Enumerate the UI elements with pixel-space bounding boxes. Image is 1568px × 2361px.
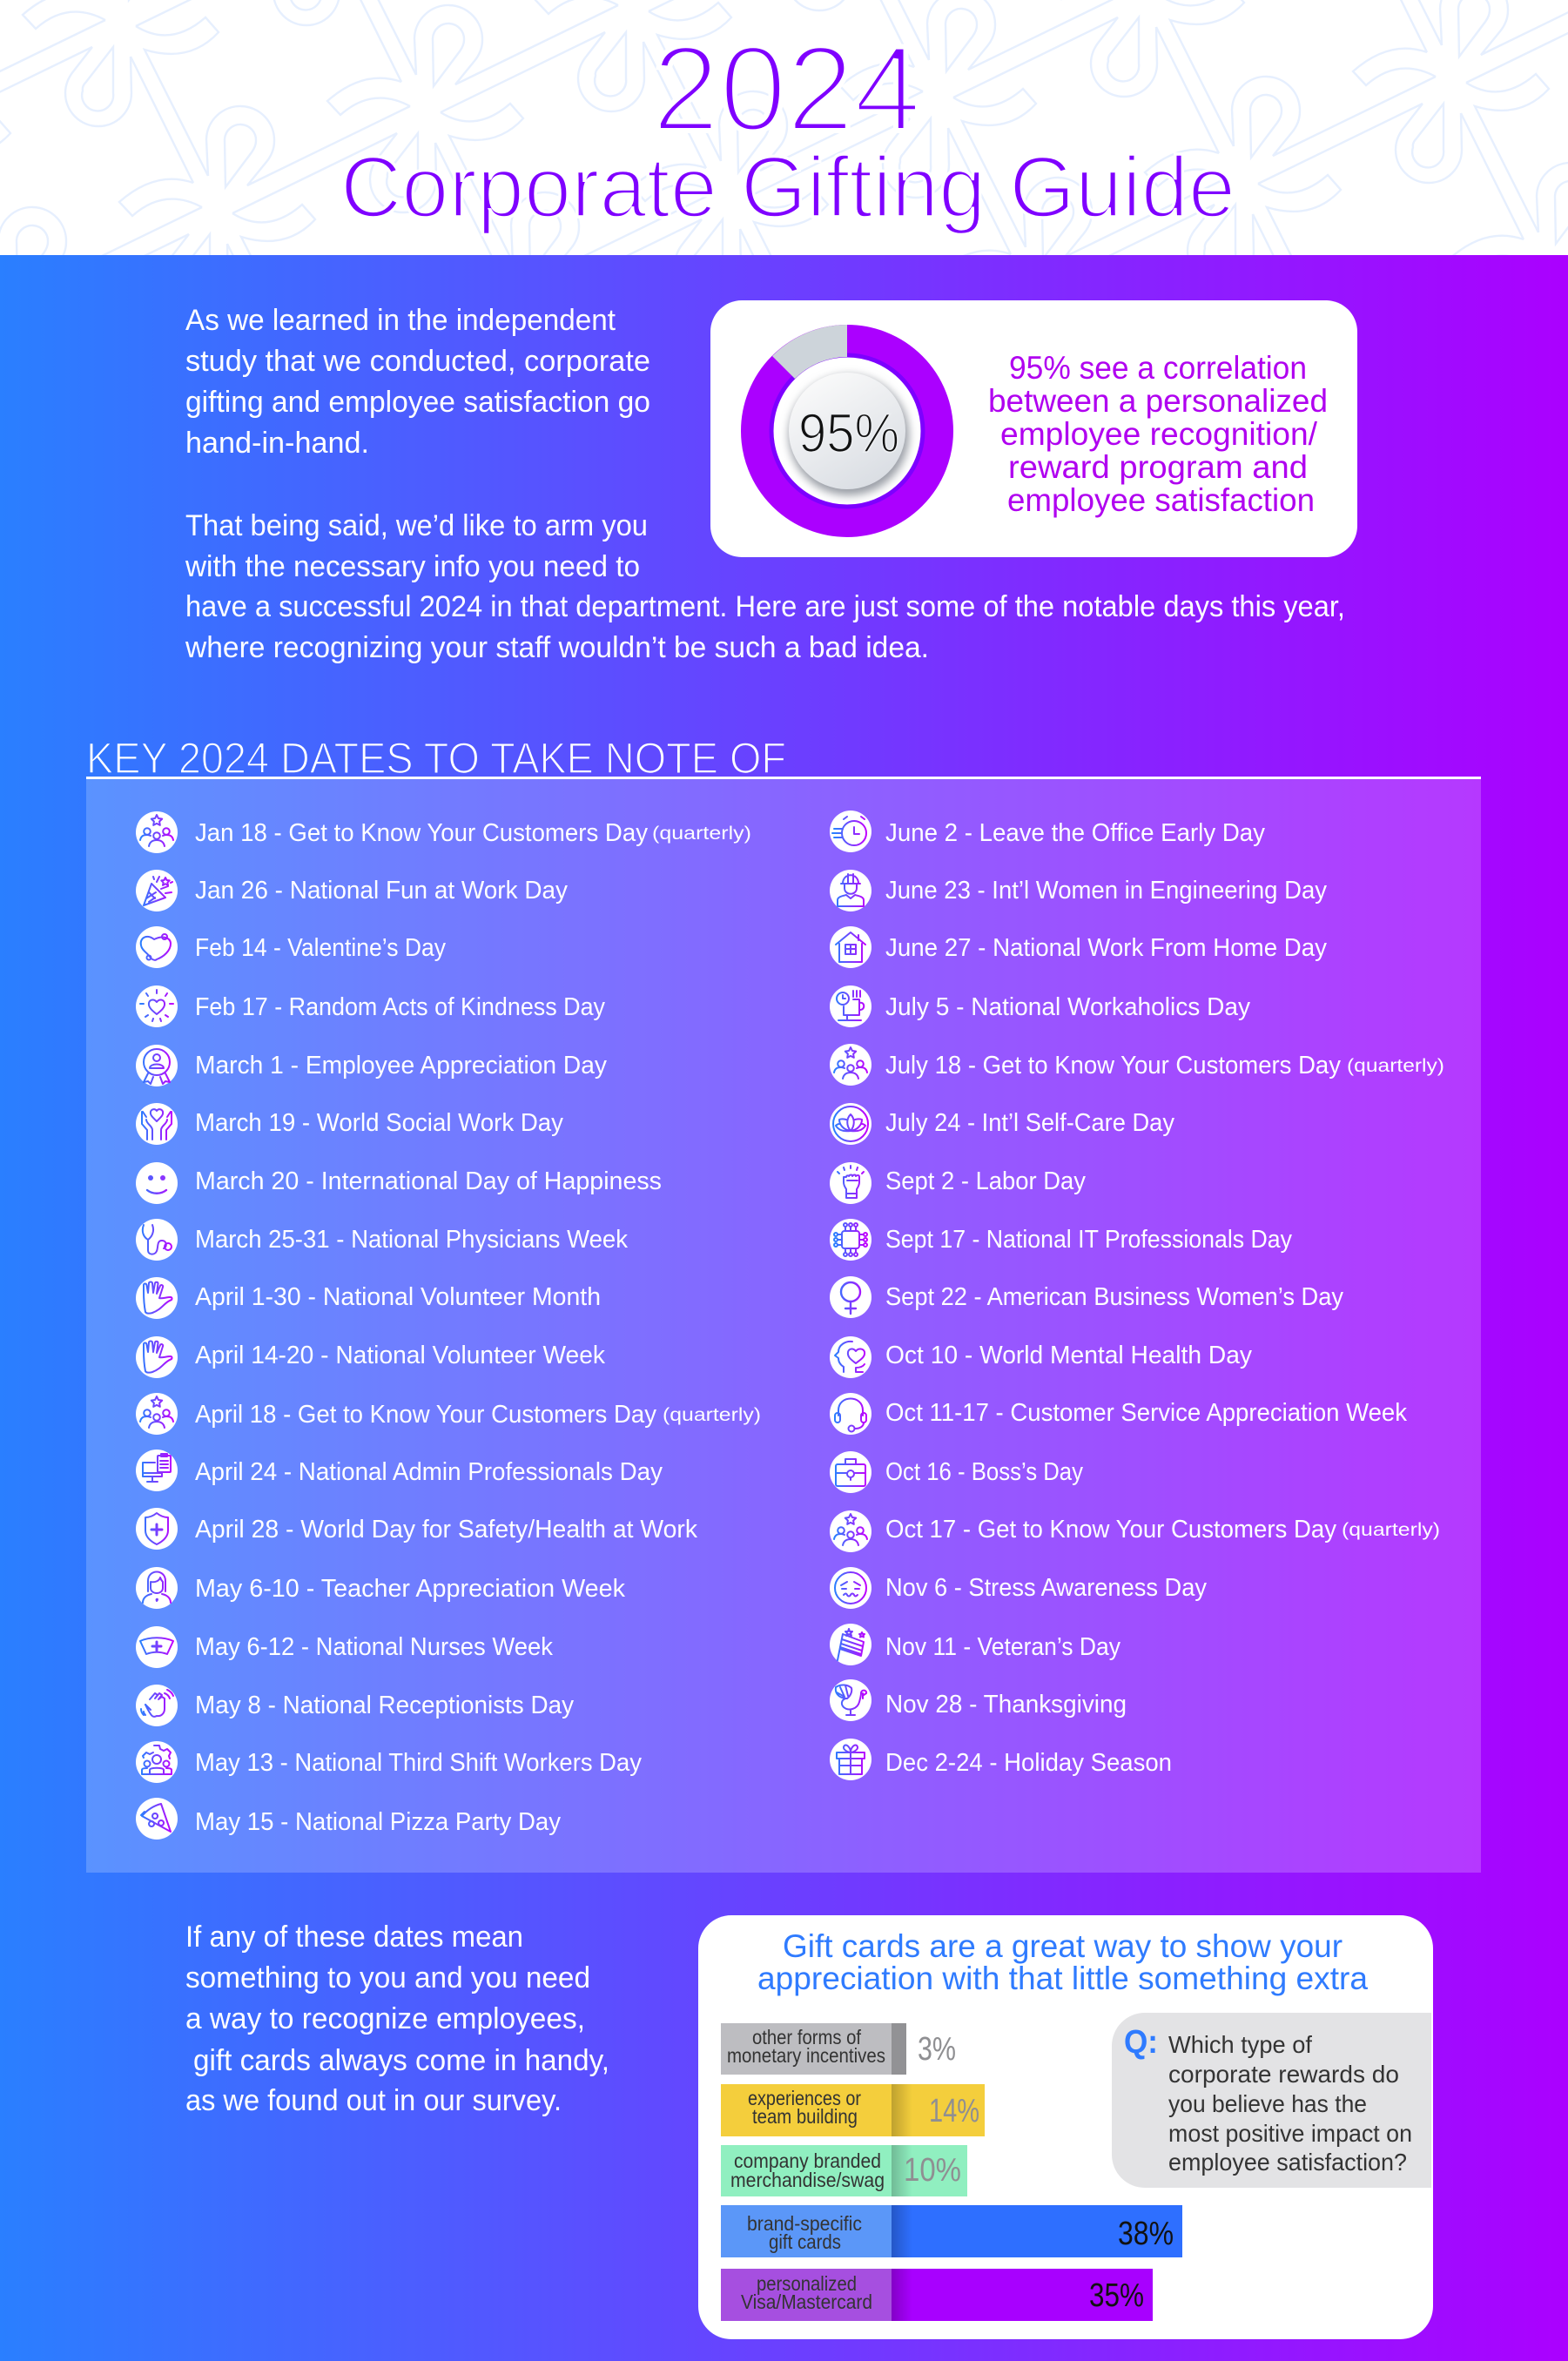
- bar: other forms of monetary incentives: 3%: [918, 2031, 956, 2068]
- icon: gear with people: [136, 1741, 178, 1783]
- date row: Dec 2-24: [830, 1739, 1172, 1780]
- icon: monitor and clipboard: [136, 1450, 178, 1491]
- date row: Oct 10: Oct 10 - World Mental Health Day: [885, 1342, 1252, 1369]
- icon: circuit chip: [830, 1219, 871, 1261]
- icon: glowing heart: [136, 985, 178, 1027]
- date row: May 15: [136, 1798, 561, 1840]
- panel: key dates list: [86, 779, 1481, 1873]
- date row: Oct 11-17: Oct 11-17 - Customer Service Appreciation Week: [885, 1399, 1407, 1427]
- date row: Oct 10: [830, 1336, 1252, 1378]
- date row: Nov 28: Nov 28 - Thanksgiving: [885, 1691, 1127, 1719]
- date row: March 19: [136, 1103, 563, 1145]
- date row: April 14-20: April 14-20 - National Volunteer Week: [195, 1342, 605, 1369]
- bar: company branded merchandise: company branded: [734, 2149, 881, 2172]
- date row: July 5: July 5 - National Workaholics Day: [885, 993, 1250, 1021]
- date row: March 1: [136, 1045, 607, 1086]
- date row: April 1-30: [136, 1277, 601, 1319]
- date row: May 6-12: [136, 1626, 553, 1668]
- icon: woman engineer: [830, 870, 871, 911]
- date row: Jan 26: [136, 870, 568, 911]
- date row: Nov 6: [830, 1567, 1207, 1609]
- bar: personalized Visa/Mastercard: [721, 2269, 1153, 2321]
- closing paragraph: [185, 1920, 609, 2117]
- date row: April 1-30: April 1-30 - National Volunteer Month: [195, 1283, 601, 1311]
- date row: Sept 22: Sept 22 - American Business Women’s Day: [885, 1283, 1343, 1311]
- bar: experiences or team building: 14%: [929, 2093, 979, 2129]
- date row: March 25-31: [136, 1219, 628, 1261]
- date row: Feb 14: Feb 14 - Valentine’s Day: [195, 934, 446, 962]
- intro paragraph: study that we conducted, corporate: [185, 345, 650, 378]
- survey heading: Gift cards are a great way to show your: [783, 1928, 1343, 1964]
- date row: Sept 17: [830, 1219, 1292, 1261]
- intro paragraph: [185, 304, 1345, 664]
- intro paragraph: have a successful 2024 in that department. Here are just some of the notable days this year,: [185, 590, 1345, 623]
- date row: July 18: [830, 1044, 1444, 1086]
- date row: March 19: March 19 - World Social Work Day: [195, 1109, 563, 1137]
- date row: May 8: [136, 1685, 574, 1726]
- closing paragraph: as we found out in our survey.: [185, 2084, 562, 2117]
- date row: April 28: April 28 - World Day for Safety/Health at Work: [195, 1516, 697, 1544]
- date row: May 13: May 13 - National Third Shift Workers Day: [195, 1749, 642, 1777]
- icon: safety shield: [136, 1508, 178, 1550]
- icon: people and star: [830, 1044, 871, 1086]
- bar: company branded merchandise: [721, 2145, 967, 2196]
- bar chart: [721, 2023, 1182, 2321]
- closing paragraph: something to you and you need: [185, 1961, 590, 1994]
- question box: employee satisfaction?: [1168, 2149, 1407, 2176]
- icon: lotus: [830, 1103, 871, 1145]
- icon: people and star: [830, 1510, 871, 1552]
- date row: May 6-12: May 6-12 - National Nurses Week: [195, 1633, 553, 1661]
- icon: head with heart: [830, 1336, 871, 1378]
- icon: heart: [136, 926, 178, 968]
- date row: Oct 17: (quarterly): [1342, 1520, 1440, 1540]
- date row: July 24: July 24 - Int’l Self-Care Day: [885, 1109, 1174, 1137]
- date row: Sept 2: Sept 2 - Labor Day: [885, 1167, 1086, 1195]
- date row: March 1: March 1 - Employee Appreciation Day: [195, 1052, 607, 1080]
- title: 2024: [652, 20, 921, 157]
- date row: Nov 11: [830, 1624, 1120, 1665]
- intro paragraph: gifting and employee satisfaction go: [185, 386, 650, 419]
- date row: May 8: May 8 - National Receptionists Day: [195, 1692, 574, 1719]
- date row: July 24: [830, 1103, 1174, 1145]
- icon: clapping hands: [136, 1685, 178, 1726]
- date row: Jan 26: Jan 26 - National Fun at Work Day: [195, 877, 568, 905]
- survey heading: appreciation with that little something extra: [757, 1961, 1368, 1996]
- question box: Q:: [1124, 2024, 1158, 2061]
- date row: July 18: (quarterly): [1347, 1056, 1444, 1076]
- icon: headset: [830, 1393, 871, 1435]
- icon: employee badge: [136, 1045, 178, 1086]
- closing paragraph: If any of these dates mean: [185, 1920, 523, 1954]
- intro paragraph: hand-in-hand.: [185, 427, 369, 460]
- date row: Oct 17: Oct 17 - Get to Know Your Customers Day: [885, 1516, 1336, 1544]
- date row: June 27: [830, 926, 1327, 968]
- icon: clock and coffee: [830, 985, 871, 1027]
- closing paragraph: gift cards always come in handy,: [193, 2044, 609, 2077]
- date row: Oct 11-17: [830, 1393, 1407, 1435]
- date row: Oct 17: [830, 1510, 1440, 1552]
- icon: hands holding heart: [136, 1103, 178, 1145]
- date row: July 5: [830, 985, 1250, 1027]
- icon: stressed face: [830, 1567, 871, 1609]
- date row: June 23: [830, 870, 1327, 911]
- date row: June 27: June 27 - National Work From Home Day: [885, 934, 1327, 962]
- date row: April 28: [136, 1508, 697, 1550]
- question box: [1112, 2013, 1431, 2188]
- date row: Nov 6: Nov 6 - Stress Awareness Day: [885, 1574, 1207, 1602]
- date row: July 18: July 18 - Get to Know Your Customers Day: [885, 1052, 1341, 1080]
- icon: smiley face: [136, 1162, 178, 1204]
- bar: other forms of monetary incentives: monetary incentives: [727, 2044, 885, 2067]
- closing paragraph: a way to recognize employees,: [185, 2002, 585, 2035]
- title: Corporate Gifting Guide: [340, 138, 1235, 235]
- date row: April 14-20: [136, 1336, 605, 1378]
- date row: May 6-10: May 6-10 - Teacher Appreciation Week: [195, 1575, 625, 1603]
- bar: brand-specific gift cards: [721, 2205, 1182, 2257]
- survey heading: [757, 1928, 1368, 1996]
- heading: key dates: KEY 2024 DATES TO TAKE NOTE OF: [86, 734, 786, 783]
- question box: most positive impact on: [1168, 2120, 1412, 2147]
- header background with bow pattern: [0, 0, 1568, 255]
- date row: June 2: June 2 - Leave the Office Early Day: [885, 819, 1265, 847]
- icon: briefcase: [830, 1451, 871, 1493]
- date row: Dec 2-24: Dec 2-24 - Holiday Season: [885, 1749, 1172, 1777]
- icon: stethoscope: [136, 1219, 178, 1261]
- panel: gift card survey: [698, 1915, 1433, 2339]
- date row: April 24: [136, 1450, 663, 1491]
- bar: company branded merchandise: merchandise/swag: [730, 2169, 885, 2191]
- question box: corporate rewards do: [1168, 2061, 1399, 2088]
- date row: Nov 28: [830, 1679, 1127, 1721]
- intro paragraph: where recognizing your staff wouldn’t be such a bad idea.: [185, 631, 929, 664]
- icon: raised fist: [830, 1162, 871, 1204]
- icon: raised hand: [136, 1277, 178, 1319]
- date row: Sept 17: Sept 17 - National IT Professionals Day: [885, 1226, 1292, 1254]
- donut chart: 95%: 95%: [798, 403, 899, 464]
- date row: Jan 18: [136, 811, 751, 853]
- date row: Sept 2: [830, 1162, 1086, 1204]
- icon: people and star: [136, 811, 178, 853]
- intro paragraph: with the necessary info you need to: [185, 550, 640, 583]
- icon: teacher: [136, 1567, 178, 1609]
- stat caption: reward program and: [1008, 449, 1308, 485]
- bar: brand-specific gift cards: 38%: [1118, 2216, 1174, 2252]
- date row: Feb 14: [136, 926, 446, 968]
- date row: Oct 16: [830, 1451, 1083, 1493]
- date row: March 20: [136, 1162, 662, 1204]
- date row: June 23: June 23 - Int’l Women in Engineering Day: [885, 877, 1327, 905]
- question box: Which type of: [1168, 2031, 1312, 2058]
- icon: party popper: [136, 870, 178, 911]
- icon: raised hand: [136, 1336, 178, 1378]
- date row: Feb 17: Feb 17 - Random Acts of Kindness Day: [195, 993, 605, 1021]
- date row: Nov 11: Nov 11 - Veteran’s Day: [885, 1633, 1120, 1661]
- bar: brand-specific gift cards: gift cards: [769, 2230, 841, 2253]
- stat caption: employee recognition/: [1000, 416, 1318, 452]
- stat caption: between a personalized: [988, 383, 1328, 419]
- icon: flag and stars: [830, 1624, 871, 1665]
- icon: house: [830, 926, 871, 968]
- stat caption: [988, 350, 1328, 518]
- stat caption: employee satisfaction: [1007, 482, 1315, 518]
- bar: company branded merchandise: 10%: [904, 2152, 961, 2189]
- bar: personalized Visa/Mastercard: personalized: [757, 2272, 857, 2295]
- bar: personalized Visa/Mastercard: 35%: [1089, 2277, 1144, 2314]
- intro paragraph: As we learned in the independent: [185, 304, 616, 337]
- bar: other forms of monetary incentives: other forms of: [752, 2026, 862, 2048]
- date row: Sept 22: [830, 1276, 1343, 1318]
- icon: pizza slice: [136, 1798, 178, 1840]
- stat caption: 95% see a correlation: [1009, 350, 1307, 386]
- icon: turkey: [830, 1679, 871, 1721]
- date row: Jan 18: (quarterly): [652, 824, 751, 844]
- intro paragraph: That being said, we’d like to arm you: [185, 509, 648, 542]
- date row: April 18: (quarterly): [663, 1405, 761, 1425]
- icon: nurse cap: [136, 1626, 178, 1668]
- date row: Jan 18: Jan 18 - Get to Know Your Customers Day: [195, 819, 648, 847]
- date row: May 13: [136, 1741, 642, 1783]
- bar: personalized Visa/Mastercard: Visa/Mastercard: [741, 2290, 872, 2313]
- bar: brand-specific gift cards: brand-specific: [747, 2212, 862, 2235]
- date row: May 15: May 15 - National Pizza Party Day: [195, 1808, 561, 1836]
- bar: other forms of monetary incentives: [721, 2023, 956, 2075]
- bar: experiences or team building: [721, 2084, 985, 2136]
- icon: gift box: [830, 1739, 871, 1780]
- date row: March 25-31: March 25-31 - National Physicians Week: [195, 1226, 628, 1254]
- question box: you believe has the: [1168, 2090, 1367, 2117]
- date row: Oct 16: Oct 16 - Boss’s Day: [885, 1458, 1083, 1486]
- date row: June 2: [830, 811, 1265, 852]
- date row: April 18: April 18 - Get to Know Your Customers Day: [195, 1401, 656, 1429]
- date row: May 6-10: [136, 1567, 625, 1609]
- date row: Feb 17: [136, 985, 605, 1027]
- donut chart: 95%: [757, 325, 937, 521]
- date row: April 18: [136, 1393, 761, 1435]
- icon: stopwatch: [830, 811, 871, 852]
- icon: female symbol: [830, 1276, 871, 1318]
- panel: 95% stat card: [710, 300, 1357, 557]
- bar: experiences or team building: team building: [752, 2105, 858, 2128]
- icon: people and star: [136, 1393, 178, 1435]
- bar: experiences or team building: experiences or: [748, 2087, 861, 2109]
- date row: April 24: April 24 - National Admin Professionals Day: [195, 1458, 663, 1486]
- title: [340, 20, 1235, 235]
- date row: March 20: March 20 - International Day of Happiness: [195, 1167, 662, 1195]
